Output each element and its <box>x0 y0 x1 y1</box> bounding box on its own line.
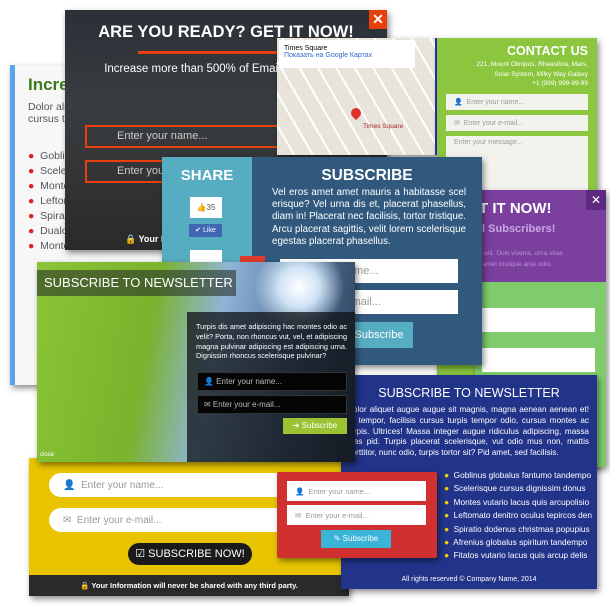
map info box: Times Square <box>284 45 327 52</box>
panel: are you ready dark <box>65 10 387 250</box>
input: email <box>446 115 588 131</box>
list: navy bullets <box>444 470 592 560</box>
panel: purple get it now <box>475 190 606 467</box>
share column <box>162 157 252 365</box>
button: subscribe now <box>128 543 252 565</box>
input: yellow name: 👤 Enter your name... <box>63 480 163 490</box>
list: navy bullets: ● Goblinus globalus fantumo tandempo <box>444 470 591 480</box>
list: increase bullets: ● Montes vutario <box>28 240 109 252</box>
list: navy bullets: ● Leftomato denitro oculus tepircos den <box>444 510 592 520</box>
input: subscribe name: Enter your name... <box>288 265 378 277</box>
like button: ✔ Like <box>195 227 216 234</box>
close button orange: ✕ <box>372 11 384 27</box>
input: name: 👤 Enter your name... <box>454 99 524 106</box>
list: increase bullets: ● Spiratio dodenus <box>28 210 119 222</box>
input: email: ✉ Enter your e-mail... <box>454 120 523 127</box>
list: increase bullets: ● Leftomato denitro <box>28 195 122 207</box>
navy footer: All rights reserved © Company Name, 2014 <box>401 576 537 583</box>
heading: leaves title: SUBSCRIBE TO NEWSLETTER <box>44 275 233 290</box>
button: subscribe teal: Subscribe <box>355 329 403 341</box>
text: subscribe body: Vel eros amet amet mauris a habitasse scel erisque? Vel urna dis et, placerat phasellus, diam in! Placerat nec facilisis, tortor tristique. Arcu placerat sagittis, velit lorem scelerisque egestas placerat phasellus. <box>272 187 466 247</box>
address: Solar System, Milky Way Galaxy <box>494 70 588 78</box>
input: message: Enter your message... <box>454 139 522 146</box>
text purple: t amet tristique ante odio. <box>479 261 552 268</box>
input: leaves email: ✉ Enter your e-mail... <box>204 400 281 409</box>
close button purple: ✕ <box>591 193 601 207</box>
heading: share: SHARE <box>181 167 233 184</box>
heading: contact us: CONTACT US <box>507 44 588 58</box>
list: increase bullets: ● Goblinus globalus <box>28 150 124 162</box>
input: name orange: Enter your name... <box>117 130 208 142</box>
input: leaves name: 👤 Enter your name... <box>204 377 282 386</box>
panel: navy newsletter <box>341 375 597 589</box>
list: navy bullets: ● Montes vutario lacus quis arcupolisio <box>444 497 589 507</box>
address: 221, Mount Olimpus, Rheasilvia, Mars, <box>476 61 588 68</box>
like button <box>189 224 222 237</box>
subtitle: Increase more than 500% of Email Subscribers! <box>104 63 348 75</box>
button: leaves subscribe: ➜ Subscribe <box>293 421 337 430</box>
like count <box>190 197 222 218</box>
panel: red subscribe <box>277 472 437 558</box>
map label: Times Square <box>363 123 403 130</box>
button: leaves subscribe <box>283 418 347 434</box>
footer note: 🔒 Your Information will never be shared <box>125 234 299 244</box>
address: +1 (999) 999-99-99 <box>532 80 588 87</box>
button: red subscribe: ✎ Subscribe <box>334 534 378 543</box>
text purple: g elit. Duis viverra, urna vitae <box>479 250 563 257</box>
input: subscribe name <box>280 259 458 283</box>
purple header <box>475 190 606 282</box>
dark form box <box>187 312 355 462</box>
close label: close <box>40 452 54 458</box>
list: increase bullets: ● Dualo globalus <box>28 225 110 237</box>
list: increase bullets: ● Montes vutario <box>28 180 109 192</box>
text: increase body: Dolor aliquet augue augue sit magnis, facilisis cursus turpis tempor odio, placerat mattis <box>28 101 241 125</box>
text: leaves body: Turpis dis amet adipiscing hac montes odio ac velit? Porta, non rhoncus vut, vel, et adipiscing magna pulvinar adipiscing est adipiscing urna. Dignissim rhoncus scelerisque pulvinar? <box>196 322 347 360</box>
map info box <box>279 40 415 68</box>
close button orange <box>369 10 387 29</box>
input: purple name <box>482 308 595 332</box>
list: navy bullets: ● Afrenius globalus spiritum tandempo <box>444 537 587 547</box>
input: email orange: Enter your e-mail... <box>117 165 210 177</box>
input: name <box>446 94 588 110</box>
list: navy bullets: ● Fitatos vutario lacus quis arcup delis <box>444 550 587 560</box>
button: subscribe teal <box>345 322 413 348</box>
google plus tab <box>240 256 265 263</box>
panel: yellow subscribe now <box>29 458 349 596</box>
input: subscribe email: Enter your e-mail... <box>288 296 381 308</box>
input: yellow email <box>49 508 319 532</box>
footer strip <box>29 575 349 596</box>
heading: are you ready: ARE YOU READY? GET IT NOW! <box>98 23 354 41</box>
heading: increase: Increase more than 500% <box>28 75 232 94</box>
icon: map pin <box>349 106 363 120</box>
input: yellow name <box>49 473 319 497</box>
input: red email: ✉ Enter your e-mail... <box>295 510 369 520</box>
input: message <box>446 136 588 192</box>
panel: leaves newsletter <box>37 262 355 462</box>
second share box <box>190 250 222 271</box>
button: subscribe now: ☑ SUBSCRIBE NOW! <box>135 548 245 560</box>
input: purple email <box>482 348 595 372</box>
orange line <box>138 51 318 54</box>
subtitle purple: il Subscribers! <box>479 223 555 235</box>
input: red name: 👤 Enter your name... <box>295 486 370 496</box>
footer strip: 🔒 Your Information will never be shared with any third party. <box>80 581 298 590</box>
panel: contact us green <box>437 38 597 468</box>
heading: get it now: T IT NOW! <box>479 200 551 217</box>
list: increase bullets <box>28 150 129 252</box>
list: increase bullets: ● Scelerisque cursus <box>28 165 129 177</box>
heading: leaves title <box>37 270 236 296</box>
input: red email <box>287 505 426 525</box>
input: yellow email: ✉ Enter your e-mail... <box>63 514 161 526</box>
text: navy body: Dolor aliquet augue augue sit magnis, magna aenean aenean et! Et tempor, facilisis cursus turpis tempor odio, cursus montes ac turpis. Ultrices! Massa integer augue ridiculus adipiscing, massa cras pid. Turpis placerat scelerisque, vut odio mus non, mattis porttitor, nunc odio, turpis tortor sit? Pid amet, sed facilisis. <box>347 405 589 457</box>
text purple <box>479 250 563 268</box>
heading: subscribe: SUBSCRIBE <box>321 167 413 184</box>
button: red subscribe <box>321 530 391 548</box>
map info box: Показать на Google Картах <box>284 52 372 59</box>
close button purple <box>586 190 606 210</box>
input: leaves email <box>197 395 347 414</box>
input: email orange <box>85 160 375 183</box>
address <box>476 61 588 87</box>
input: name orange <box>85 125 375 148</box>
input: subscribe email <box>280 290 458 314</box>
list: navy bullets: ● Scelerisque cursus dignissim donus <box>444 483 586 493</box>
like count: 👍35 <box>197 203 215 212</box>
panel: share and subscribe <box>162 157 482 365</box>
input: red name <box>287 481 426 501</box>
heading: navy newsletter: SUBSCRIBE TO NEWSLETTER <box>378 386 560 400</box>
panel: increase light <box>10 65 280 385</box>
list: navy bullets: ● Spiratio dodenus christmas popupius <box>444 524 590 534</box>
input: leaves name <box>197 372 347 391</box>
panel: map <box>277 38 437 155</box>
